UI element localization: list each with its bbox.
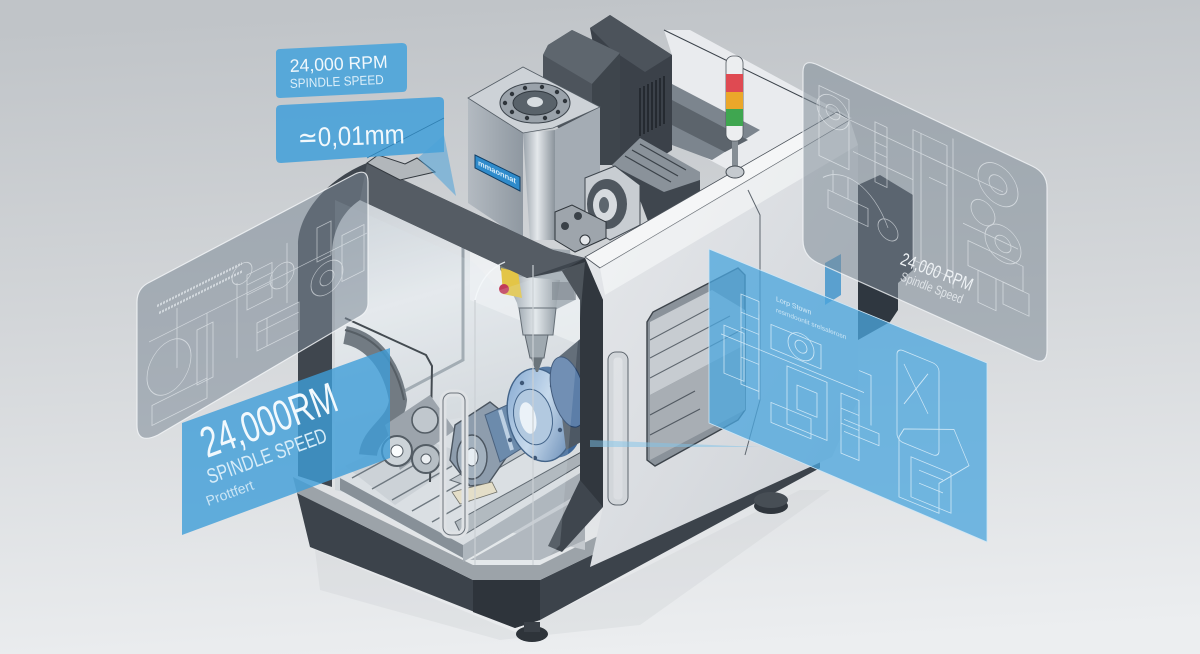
flange [513, 361, 591, 463]
table bed [340, 395, 585, 562]
callout: spindle speed [276, 43, 407, 98]
panel: large blue stat [182, 348, 390, 535]
panel: left grey schematic [137, 172, 368, 438]
schematic drawing: right grey [817, 75, 1029, 326]
stat: right grey [893, 249, 976, 308]
callout: spindle speed: 24,000 RPM [289, 52, 388, 76]
electrical box: right [590, 15, 672, 185]
warning panel [499, 247, 522, 298]
back wall [335, 190, 585, 550]
nameplate: mmaonnat [478, 158, 516, 186]
valve block [555, 205, 606, 252]
glass door [335, 200, 585, 565]
caption: right blue: resmdoonlit srelsalerosn [776, 307, 847, 341]
chuck [450, 402, 515, 486]
inner divider [345, 318, 432, 482]
interior [335, 190, 592, 562]
rear cabinet [543, 15, 852, 185]
shaft [485, 397, 535, 462]
caption: right blue: Lorp Stown [776, 294, 811, 317]
panel: right blue schematic [709, 249, 987, 542]
stat value: 24,000RM [194, 374, 344, 467]
wall recess [378, 205, 463, 396]
schematic drawing: right blue [721, 276, 969, 526]
callout: precision [276, 97, 456, 196]
bolt ring [500, 83, 570, 123]
foot: left [516, 622, 548, 642]
door window [647, 268, 745, 466]
door frame [298, 155, 603, 552]
callout: precision: ≃0,01mm [297, 119, 405, 153]
panel: right grey schematic [803, 63, 1047, 361]
spindle head clearance slot [367, 155, 435, 180]
tailstock [555, 335, 585, 450]
foot: right [754, 492, 788, 514]
right housing [585, 112, 858, 567]
rotary assembly [382, 335, 592, 486]
tool sensor [452, 482, 497, 504]
stat label: SPINDLE SPEED [204, 424, 330, 489]
rear wall [664, 30, 852, 176]
schematic drawing: left grey [147, 201, 367, 428]
stack light tower [726, 56, 744, 178]
floor shadow [315, 490, 830, 640]
machine base [293, 430, 820, 642]
callout: spindle speed: SPINDLE SPEED [289, 72, 384, 91]
nameplate [475, 155, 520, 191]
motor flange [585, 166, 640, 240]
electrical box: left [543, 30, 620, 165]
housing handle [611, 355, 625, 502]
stat: right grey: Spindle Speed [898, 269, 965, 306]
door handle: left [443, 393, 465, 535]
servo motor [555, 138, 700, 252]
light beam [590, 440, 760, 447]
cable carrier arc [345, 335, 398, 455]
spindle nose [505, 245, 576, 372]
left pulleys [382, 395, 455, 473]
spindle head [468, 67, 600, 240]
stat: right grey: 24,000 RPM [898, 249, 976, 295]
rear object behind panel [825, 175, 913, 340]
stat footnote: Prottfert [204, 477, 256, 509]
